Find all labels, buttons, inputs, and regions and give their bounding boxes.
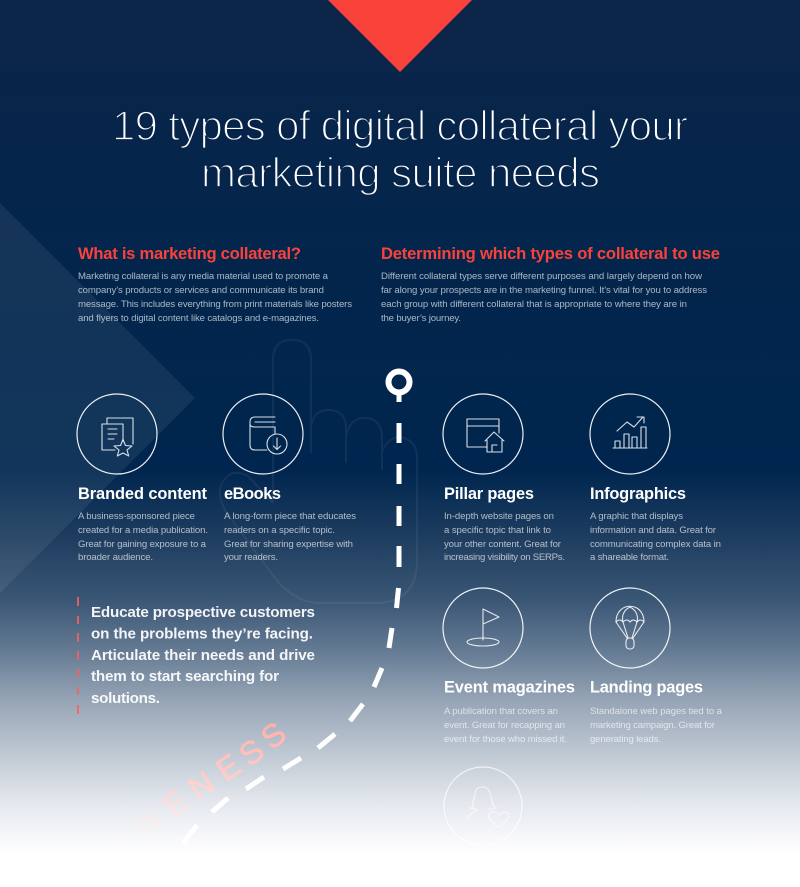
faded icon: person with heart <box>444 767 522 845</box>
card: branded content: broader audience. <box>78 552 153 563</box>
card: infographics: information and data. Great for <box>590 525 717 536</box>
card: pillar pages: your other content. Great for <box>444 539 562 550</box>
card: ebooks: A long-form piece that educates <box>224 511 356 522</box>
card: ebooks <box>223 394 356 563</box>
card: event magazines: Event magazines <box>444 678 575 696</box>
card: infographics: A graphic that displays <box>590 511 683 522</box>
card: pillar pages: increasing visibility on SERPs. <box>444 552 565 563</box>
callout: educate prospective customers: Articulate their needs and drive <box>91 647 315 664</box>
background triangle <box>0 203 195 593</box>
intro: what is marketing collateral: message. This includes everything from print materials like posters <box>78 299 352 310</box>
icon: document with star <box>77 394 157 474</box>
card: pillar pages <box>443 394 565 563</box>
card: ebooks: eBooks <box>224 485 281 503</box>
card: branded content <box>77 394 208 563</box>
card: infographics: Infographics <box>590 485 686 503</box>
card: ebooks: your readers. <box>224 552 278 563</box>
card: event magazines: event for those who missed it. <box>444 734 567 745</box>
card: branded content: Branded content <box>78 485 208 503</box>
pin marker <box>388 372 410 402</box>
intro: determining which types: the buyer’s journey. <box>381 313 461 324</box>
icon: book with download <box>223 394 303 474</box>
icon: window with house <box>443 394 523 474</box>
intro: what is marketing collateral: and flyers to digital content like catalogs and e-magazines. <box>78 313 319 324</box>
callout: educate prospective customers: solutions. <box>91 690 160 707</box>
card: infographics <box>590 394 721 563</box>
hand outline <box>220 340 417 603</box>
title: marketing suite needs <box>201 149 600 196</box>
card: pillar pages: In-depth website pages on <box>444 511 554 522</box>
card: branded content: created for a media publication. <box>78 525 208 536</box>
icon: flag <box>443 588 523 668</box>
icon: parachute <box>590 588 670 668</box>
callout: educate prospective customers: on the problems they’re facing. <box>91 626 313 642</box>
intro: what is marketing collateral: Marketing collateral is any media material used to promote a <box>78 271 329 282</box>
card: ebooks: readers on a specific topic. <box>224 525 335 536</box>
callout: educate prospective customers: them to start searching for <box>91 668 279 685</box>
red triangle <box>328 0 472 72</box>
title <box>112 102 688 196</box>
card: infographics: a shareable format. <box>590 552 669 563</box>
card: landing pages: marketing campaign. Great for <box>590 720 716 731</box>
title: 19 types of digital collateral your <box>112 102 688 149</box>
intro: determining which types <box>381 244 720 324</box>
intro: what is marketing collateral: company’s products or services and communicate its brand <box>78 285 324 296</box>
callout: educate prospective customers <box>78 597 315 714</box>
funnel path <box>183 372 410 843</box>
card: landing pages <box>590 588 723 745</box>
intro: what is marketing collateral: What is marketing collateral? <box>78 244 301 263</box>
card: pillar pages: Pillar pages <box>444 485 534 503</box>
card: event magazines: event. Great for recapping an <box>444 720 565 731</box>
card: landing pages: Standalone web pages tied to a <box>590 706 723 717</box>
card: event magazines: A publication that covers an <box>444 706 558 717</box>
intro: what is marketing collateral <box>78 244 352 324</box>
callout: educate prospective customers: Educate prospective customers <box>91 604 315 621</box>
card: event magazines <box>443 588 575 745</box>
intro: determining which types: far along your prospects are in the marketing funnel. It’s vital for you to address <box>381 285 707 296</box>
card: landing pages: Landing pages <box>590 678 703 696</box>
intro: determining which types: Determining which types of collateral to use <box>381 244 720 263</box>
card: infographics: communicating complex data in <box>590 539 721 550</box>
card: branded content: A business-sponsored piece <box>78 511 195 522</box>
icon: bar chart with arrow <box>590 394 670 474</box>
intro: determining which types: Different collateral types serve different purposes and largely depend on how <box>381 271 702 282</box>
card: pillar pages: a specific topic that link to <box>444 525 551 536</box>
intro: determining which types: each group with different collateral that is appropriate to where they are in <box>381 299 687 310</box>
card: ebooks: Great for sharing expertise with <box>224 539 353 550</box>
card: branded content: Great for gaining exposure to a <box>78 539 207 550</box>
card: landing pages: generating leads. <box>590 734 661 745</box>
dashed callout rule <box>77 597 79 714</box>
awareness label: RENESS <box>131 715 293 847</box>
